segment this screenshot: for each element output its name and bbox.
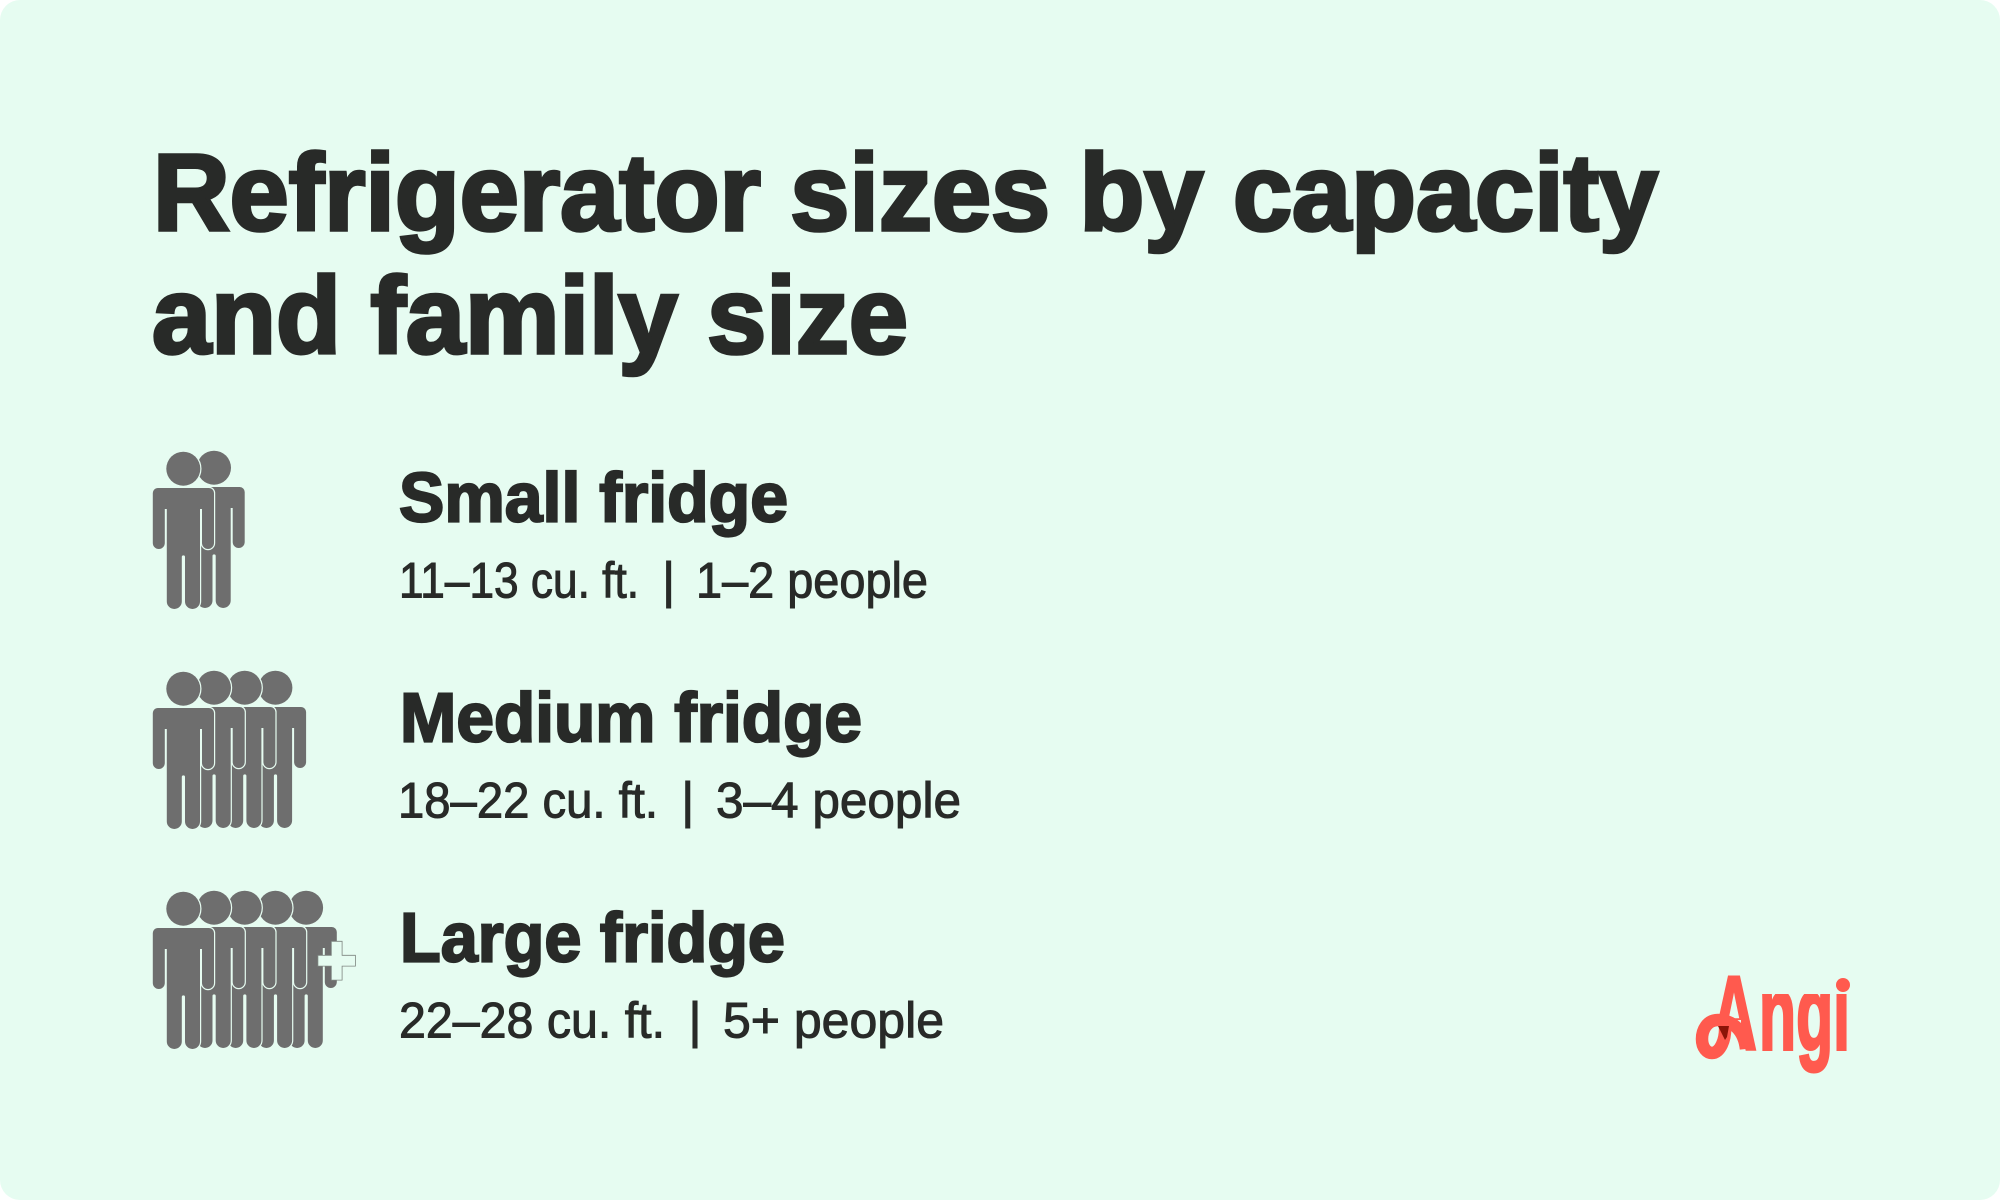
logo: Angi: ngi — [1759, 954, 1850, 1072]
title: and family size — [152, 255, 908, 377]
heading: small fridge: Small fridge — [399, 459, 788, 537]
details: medium fridge: 3–4 people — [716, 773, 961, 829]
details: medium fridge — [398, 773, 961, 829]
row: medium fridge — [153, 671, 961, 829]
title: Refrigerator sizes by capacity — [153, 132, 1658, 254]
row: small fridge — [153, 451, 928, 609]
details: large fridge — [399, 993, 944, 1049]
details: small fridge: 11–13 cu. ft. — [399, 553, 639, 609]
details: small fridge: 1–2 people — [696, 553, 928, 609]
heading: large fridge: Large fridge — [400, 899, 785, 977]
title — [152, 132, 1658, 377]
logo: Angi — [1696, 976, 1850, 1074]
details: large fridge: 5+ people — [723, 993, 944, 1049]
row: large fridge — [153, 891, 944, 1049]
details: large fridge: | — [688, 993, 702, 1049]
logo: Angi: A — [1711, 954, 1757, 1072]
icon: four people — [153, 671, 306, 829]
details: medium fridge: | — [681, 773, 694, 829]
icon: two people — [153, 451, 245, 609]
details: large fridge: 22–28 cu. ft. — [399, 993, 665, 1049]
details: small fridge — [399, 553, 928, 609]
heading: medium fridge: Medium fridge — [400, 679, 862, 757]
details: small fridge: | — [662, 553, 675, 609]
icon: five people plus — [153, 891, 355, 1049]
details: medium fridge: 18–22 cu. ft. — [398, 773, 658, 829]
